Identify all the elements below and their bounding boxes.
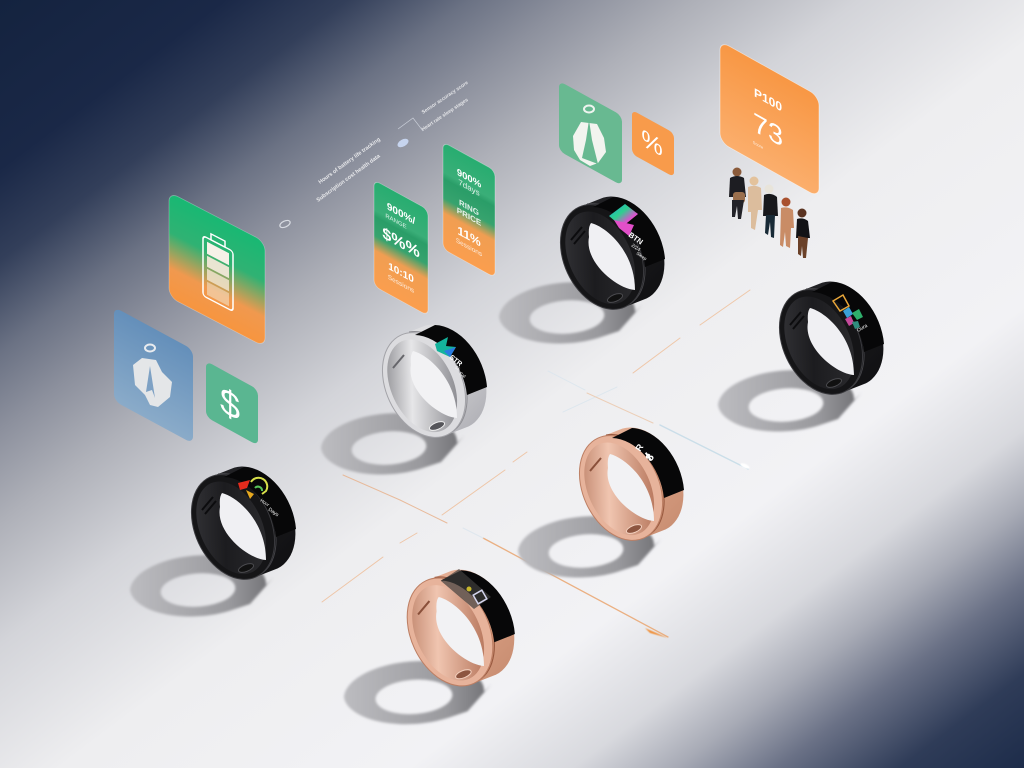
person 5 [796,208,810,258]
card: percent [632,110,674,177]
ring display: rainbow bars: Sleep [635,251,648,262]
icon: battery [203,230,233,311]
ring display: teal logo: STR [448,354,463,368]
card: stacked stats left: $%% [382,223,420,262]
card: stacked stats left: 10:10 [388,260,414,286]
card: dollar [206,361,258,446]
ring display: rainbow bars [609,204,648,262]
floating caption lines: Hours of battery life tracking [318,137,382,186]
ring: rose gold right [518,422,684,578]
ring display: activity rings [238,478,280,518]
ring: black right [718,276,884,432]
ring display: teal logo [435,337,467,379]
ring: black lower left [130,461,296,617]
ring display: grey fade with icon [441,569,491,609]
icon: body silhouette [133,344,172,407]
floor light lines [322,290,750,637]
card: stacked stats left: RANGE [385,213,407,231]
floating caption lines: Heart rate sleep stages [421,97,470,133]
ring display: activity rings: Hour [259,498,271,508]
card: score 73: P100 [754,85,782,115]
card: score 73: Score [753,140,764,150]
person 3 [763,184,778,238]
ring: rose gold bottom [344,564,515,724]
card: stacked stats right: 900% [457,167,481,191]
floating caption lines [279,80,470,229]
ring display: white icons [633,442,657,464]
card: score 73 [720,41,819,197]
floating caption lines: Sensor accuracy score [421,80,470,116]
ring display: white icons: R [633,442,646,453]
ring: silver [321,319,487,475]
card: stacked stats right [443,142,495,278]
card: green body silhouette [559,81,622,186]
ring display: teal logo: 5k [454,365,462,372]
person 2 [748,176,762,230]
card: stacked stats left: 900%/ [387,201,415,227]
icon: figure [573,106,606,166]
person 4 [780,198,794,248]
ring: black top centre [499,191,665,344]
card: stacked stats right: RING [459,197,479,218]
light sparkle [645,462,750,638]
person 1 [729,168,746,219]
people group [729,168,810,258]
card: stacked stats right: Sessions [456,237,483,259]
card: stacked stats right: PRICE [457,205,481,228]
card: percent: % [641,125,663,162]
ring display: colour grid: Oura [856,323,869,334]
card: stacked stats right: 11% [457,223,481,250]
card: stacked stats left: Sessions [388,274,415,295]
card: battery [169,192,265,347]
ring display: colour grid [833,295,869,334]
card: blue body silhouette [114,307,193,444]
floating caption lines: Subscription cost health data [316,153,382,204]
card: stacked stats left [374,180,428,316]
card: score 73: 73 [753,107,783,154]
ring display: rainbow bars: BTN [627,230,645,246]
ring display: activity rings: Days [267,507,280,518]
ring display: white icons: 8 [644,452,657,464]
ring display: rainbow bars: 2/24 [630,243,641,253]
card: stacked stats right: 7days [458,177,480,198]
ring display: teal logo: Cal [458,371,467,379]
icon: dollar sign: $ [220,379,240,430]
